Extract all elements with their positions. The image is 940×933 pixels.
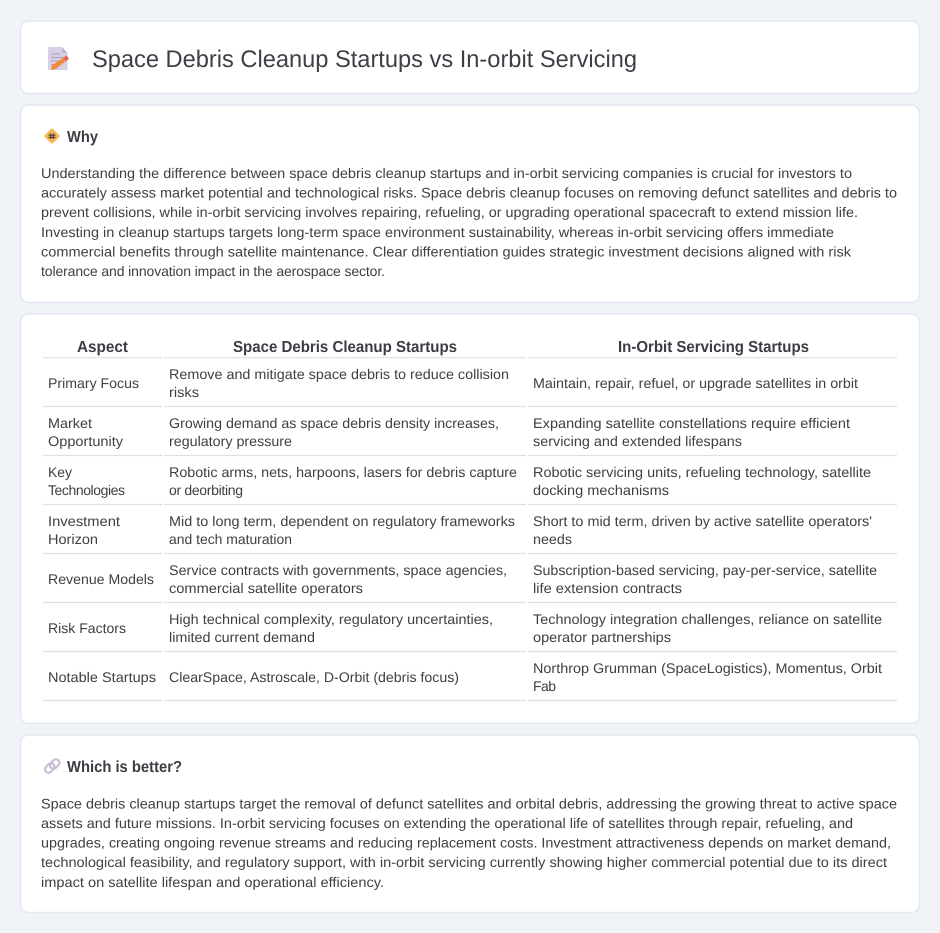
table row: primary focus: Primary Focus [48,375,139,391]
table row: key technologies: Robotic servicing units, refueling technology, satellite [533,464,871,480]
table row: revenue models: Revenue Models [48,571,154,587]
text block: why paragraph [41,165,897,279]
table row: primary focus: risks [169,384,199,400]
panel: comparison table [20,314,920,724]
table header row: Space Debris Cleanup Startups [233,339,457,356]
table row: risk factors [48,611,882,645]
text block: which is better paragraph: technological feasibility, and regulatory support, with in-orbit servicing currently showing higher commercial potential due to its direct [41,854,887,870]
icon: link [44,758,61,774]
table row: risk factors: limited current demand [169,629,315,645]
text block: why paragraph: tolerance and innovation impact in the aerospace sector. [41,263,385,279]
table row: market opportunity: Growing demand as space debris density increases, [169,415,499,431]
table row: primary focus: Remove and mitigate space debris to reduce collision [169,366,509,382]
title: Space Debris Cleanup Startups vs In-orbit Servicing [92,46,637,73]
table row: market opportunity: Opportunity [48,433,123,449]
table header row [77,339,809,356]
heading: which is better: Which is better? [67,759,182,776]
table row: revenue models [48,562,877,596]
text block: which is better paragraph [41,796,897,890]
table row: market opportunity: regulatory pressure [169,433,292,449]
table row: primary focus: Maintain, repair, refuel, or upgrade satellites in orbit [533,375,858,391]
table row: revenue models: Subscription-based servicing, pay-per-service, satellite [533,562,877,578]
table row: primary focus [48,366,858,400]
table row: key technologies: Technologies [48,482,125,498]
table row: market opportunity: Expanding satellite constellations require efficient [533,415,850,431]
table row: key technologies: Robotic arms, nets, harpoons, lasers for debris capture [169,464,517,480]
table row: investment horizon: Mid to long term, dependent on regulatory frameworks [169,513,515,529]
panel: which is better [20,735,920,912]
panel: why [20,105,920,302]
text block: why paragraph: Investing in cleanup startups targets long-term space environment sustainability, whereas in-orbit servicing offers immediate [41,224,834,240]
table row: risk factors: Risk Factors [48,620,126,636]
table row: market opportunity: servicing and extended lifespans [533,433,742,449]
text block: which is better paragraph: assets and future missions. In-orbit servicing focuses on extending the operational life of satellites through repair, refueling, and [41,815,853,831]
table row: key technologies: docking mechanisms [533,482,669,498]
table row: notable startups: Fab [533,678,556,694]
icon: orange diamond [44,128,60,144]
text block: why paragraph: Understanding the difference between space debris cleanup startups and in-orbit servicing companies is crucial for investors to [41,165,852,181]
heading: why: Why [67,129,98,146]
text block: why paragraph: accurately assess market potential and technological risks. Space debris cleanup focuses on removing defunct satellites and debris to [41,185,897,201]
table header row: Aspect [77,339,129,356]
table header row: In-Orbit Servicing Startups [618,339,809,356]
table row: revenue models: life extension contracts [533,580,682,596]
table row: market opportunity [48,415,850,449]
table row: risk factors: Technology integration challenges, reliance on satellite [533,611,882,627]
table row: key technologies [48,464,871,498]
table row: investment horizon [48,513,872,547]
table row: investment horizon: Investment [48,513,120,529]
table row: revenue models: commercial satellite operators [169,580,363,596]
table row: risk factors: operator partnerships [533,629,671,645]
table row: notable startups: Northrop Grumman (SpaceLogistics), Momentus, Orbit [533,660,882,676]
table row: notable startups: Notable Startups [48,669,156,685]
table row: market opportunity: Market [48,415,92,431]
text block: which is better paragraph: Space debris cleanup startups target the removal of defunct satellites and orbital debris, addressing the growing threat to active space [41,796,897,812]
table row: investment horizon: Horizon [48,531,98,547]
table row: notable startups: ClearSpace, Astroscale, D-Orbit (debris focus) [169,669,459,685]
table row: key technologies: or deorbiting [169,482,243,498]
icon: memo with pencil [48,47,69,70]
table row: notable startups [48,660,882,694]
text block: which is better paragraph: upgrades, creating ongoing revenue streams and reducing replacement costs. Investment attractiveness depends on market demand, [41,835,891,851]
table row: revenue models: Service contracts with governments, space agencies, [169,562,507,578]
text block: why paragraph: commercial benefits through satellite maintenance. Clear differentiation guides strategic investment decisions aligned with risk [41,243,852,259]
text block: which is better paragraph: impact on satellite lifespan and operational efficiency. [41,874,384,890]
table row: risk factors: High technical complexity, regulatory uncertainties, [169,611,493,627]
text block: why paragraph: prevent collisions, while in-orbit servicing involves repairing, refueling, or upgrading operational spacecraft to extend mission life. [41,204,858,220]
table row: investment horizon: needs [533,531,572,547]
table row: investment horizon: Short to mid term, driven by active satellite operators' [533,513,872,529]
table row: investment horizon: and tech maturation [169,531,292,547]
table row: key technologies: Key [48,464,72,480]
panel: title card [20,21,920,94]
